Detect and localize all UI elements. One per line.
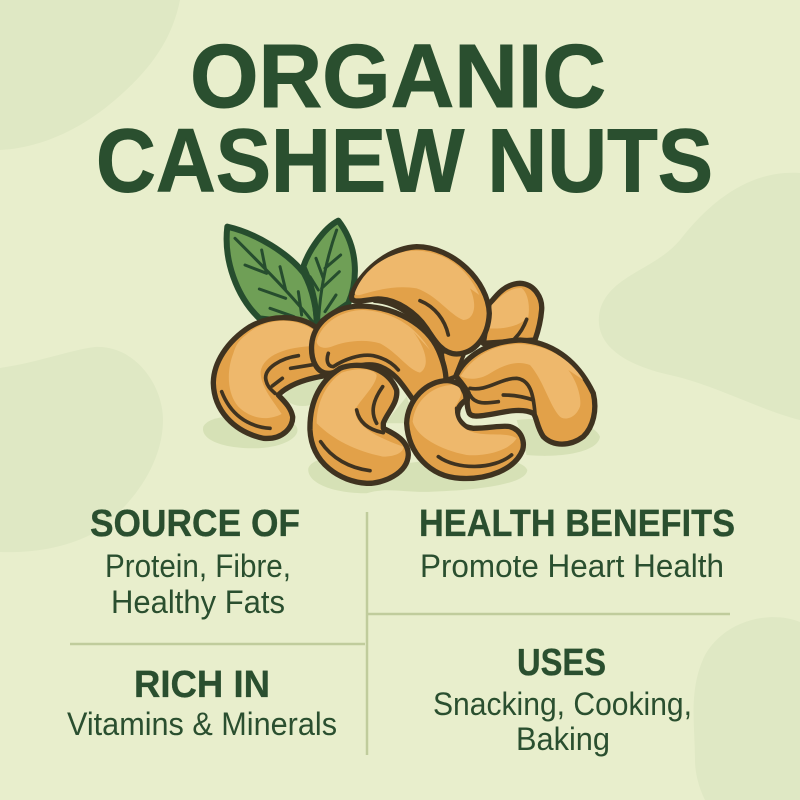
panel: uses: Baking	[516, 721, 610, 757]
panel: health benefits	[419, 503, 735, 584]
nut: right	[456, 340, 595, 444]
leaf: left	[227, 227, 317, 325]
panel: health benefits: HEALTH BENEFITS	[419, 503, 735, 545]
nut: centre	[312, 306, 446, 400]
nut: back right	[483, 283, 542, 343]
panel: source of: Healthy Fats	[111, 584, 285, 620]
panel: source of: Protein, Fibre,	[105, 548, 291, 584]
nut: bottom centre	[407, 381, 523, 478]
panel: uses: Snacking, Cooking,	[433, 686, 692, 722]
panel: health benefits: Promote Heart Health	[420, 548, 724, 584]
title	[96, 27, 713, 212]
leaf: right	[303, 221, 355, 325]
panel: rich in: Vitamins & Minerals	[67, 706, 337, 742]
panel: uses: USES	[517, 642, 606, 684]
nut: top	[352, 247, 489, 354]
nut: bottom left	[310, 365, 408, 483]
panel: rich in	[67, 664, 337, 742]
title: CASHEW NUTS	[96, 112, 713, 212]
panel: source of: SOURCE OF	[90, 503, 300, 545]
panel: source of	[90, 503, 300, 620]
panel: rich in: RICH IN	[134, 664, 270, 706]
dividers	[70, 512, 730, 755]
nut: left	[213, 318, 333, 438]
title: ORGANIC	[190, 27, 606, 127]
base fill between nuts	[442, 352, 465, 380]
illustration: cashew pile with leaves	[203, 221, 600, 493]
panel: uses	[433, 642, 692, 757]
